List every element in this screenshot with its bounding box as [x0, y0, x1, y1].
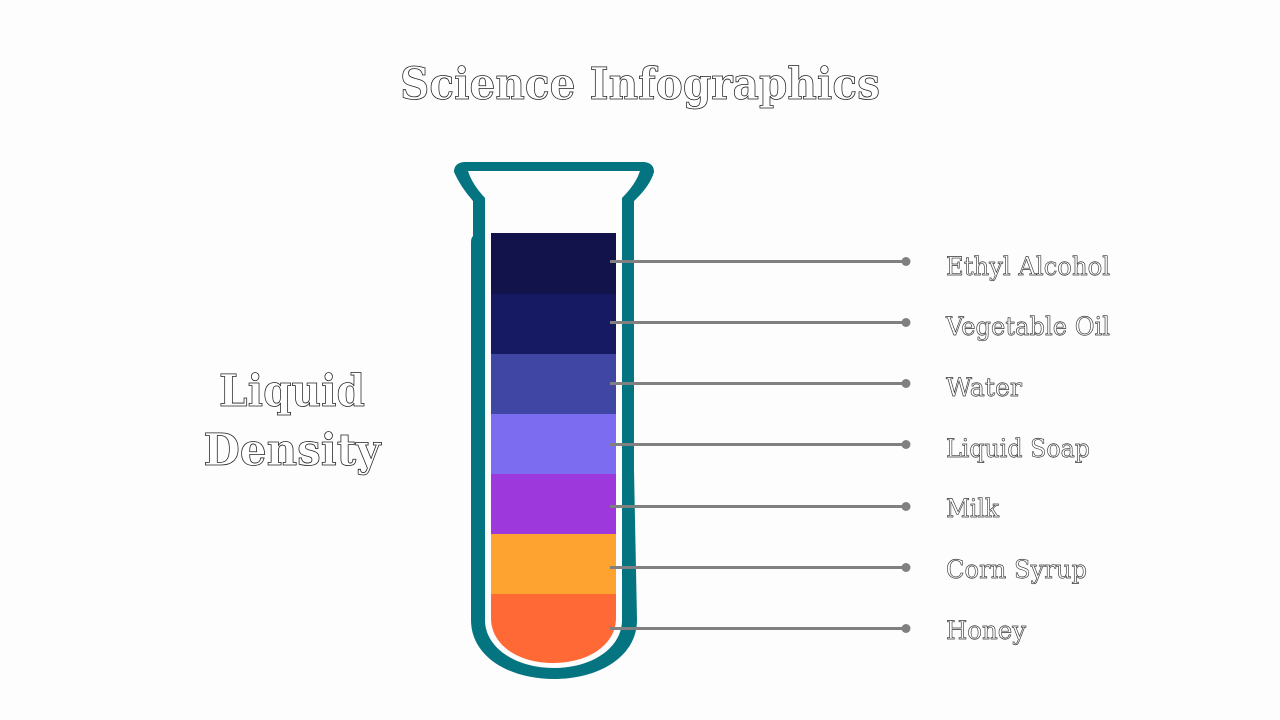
leader: water: [610, 379, 910, 388]
label: ethyl alcohol: Ethyl Alcohol: [946, 252, 1110, 281]
layer: vegetable oil: [491, 294, 616, 354]
label: honey: Honey: [946, 616, 1027, 645]
label: water: Water: [946, 373, 1022, 402]
layer: corn syrup: [491, 534, 616, 594]
leader: honey: [610, 624, 910, 633]
heading: Liquid Density: Density: [204, 425, 382, 476]
leader: ethyl alcohol: [610, 257, 910, 266]
leader: vegetable oil: [610, 318, 910, 327]
label: corn syrup: Corn Syrup: [946, 555, 1087, 584]
layer: water: [491, 354, 616, 414]
tube outline: [454, 162, 654, 679]
layer: milk: [491, 474, 616, 534]
label: vegetable oil: Vegetable Oil: [945, 312, 1110, 341]
leader: liquid soap: [610, 440, 910, 449]
layer: liquid soap: [491, 414, 616, 474]
title: Science Infographics: [400, 59, 880, 110]
leader: corn syrup: [610, 563, 910, 572]
layer: ethyl alcohol: [491, 233, 616, 294]
leader: milk: [610, 502, 910, 511]
heading: Liquid Density: Liquid: [219, 366, 365, 417]
label: liquid soap: Liquid Soap: [946, 434, 1090, 463]
test tube: [454, 162, 654, 679]
layer: honey: [491, 594, 616, 663]
heading: Liquid Density: [204, 366, 382, 476]
label: milk: Milk: [946, 494, 1000, 523]
